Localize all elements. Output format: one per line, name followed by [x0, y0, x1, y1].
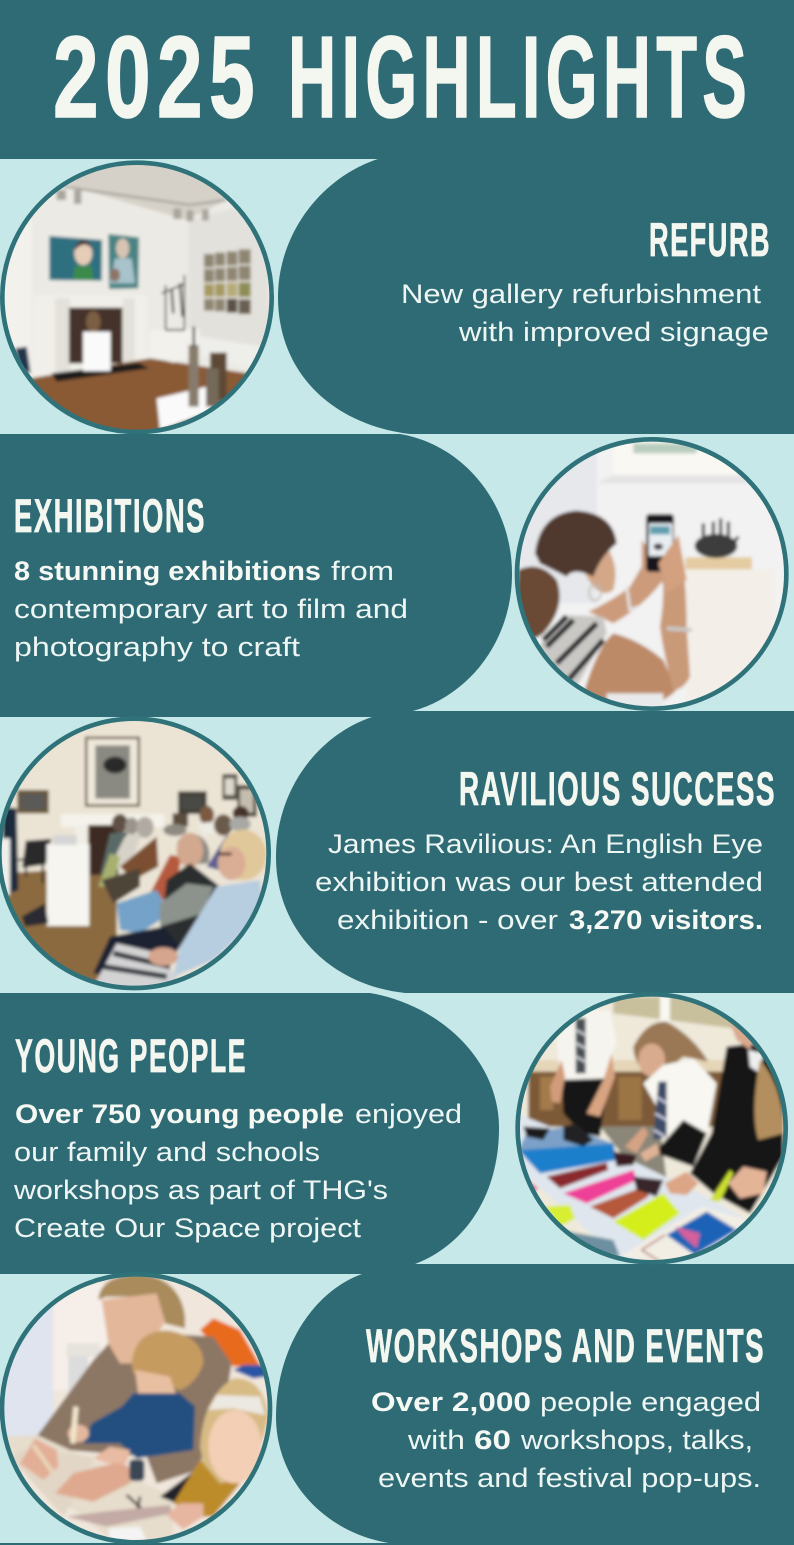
photo: visitor photographing sculpture: [513, 437, 790, 713]
photo: seated audience in gallery: [0, 717, 270, 993]
text: young people description: [13, 1099, 462, 1243]
text: refurb description: with improved signage: [458, 317, 769, 347]
text: workshops description: events and festival pop-ups.: [378, 1463, 761, 1493]
text: ravilious description: [315, 829, 763, 935]
photo: gallery interior: [0, 160, 277, 437]
text: young people description: workshops as part of THG's: [13, 1175, 388, 1205]
text: workshops description: people engaged: [540, 1387, 761, 1417]
text: workshops description: 60: [474, 1425, 511, 1455]
panel: exhibitions: [0, 434, 794, 713]
text: workshops description: [371, 1387, 761, 1493]
photo: pupils printing with rollers: [517, 993, 787, 1263]
heading: young people: YOUNG PEOPLE: [15, 1029, 247, 1082]
title: [53, 12, 752, 142]
text: exhibitions description: from: [331, 556, 394, 586]
heading: exhibitions: EXHIBITIONS: [14, 489, 206, 542]
text: exhibitions description: contemporary art to film and: [14, 594, 408, 624]
text: young people description: Over 750 young people: [15, 1099, 344, 1129]
panel: young people: [0, 993, 794, 1264]
panel: refurb: [0, 159, 794, 437]
text: workshops description: with: [407, 1425, 465, 1455]
text: exhibitions description: [14, 556, 408, 662]
text: ravilious description: exhibition - over: [337, 905, 558, 935]
text: young people description: enjoyed: [355, 1099, 462, 1129]
text: exhibitions description: photography to craft: [14, 632, 301, 662]
panel: ravilious success: [0, 717, 794, 993]
text: young people description: our family and schools: [14, 1137, 320, 1167]
text: refurb description: [401, 279, 769, 347]
text: ravilious description: exhibition was our best attended: [315, 867, 763, 897]
panel: workshops and events: [0, 1273, 794, 1544]
text: exhibitions description: 8 stunning exhibitions: [14, 556, 321, 586]
text: workshops description: Over 2,000: [371, 1387, 531, 1417]
photo: adult and children drawing: [0, 1273, 273, 1543]
text: ravilious description: James Ravilious: An English Eye: [328, 829, 763, 859]
title: 2025: [53, 12, 261, 142]
text: young people description: Create Our Space project: [14, 1213, 362, 1243]
text: refurb description: New gallery refurbishment: [401, 279, 762, 309]
text: workshops description: workshops, talks,: [520, 1425, 753, 1455]
text: ravilious description: 3,270 visitors.: [569, 905, 763, 935]
